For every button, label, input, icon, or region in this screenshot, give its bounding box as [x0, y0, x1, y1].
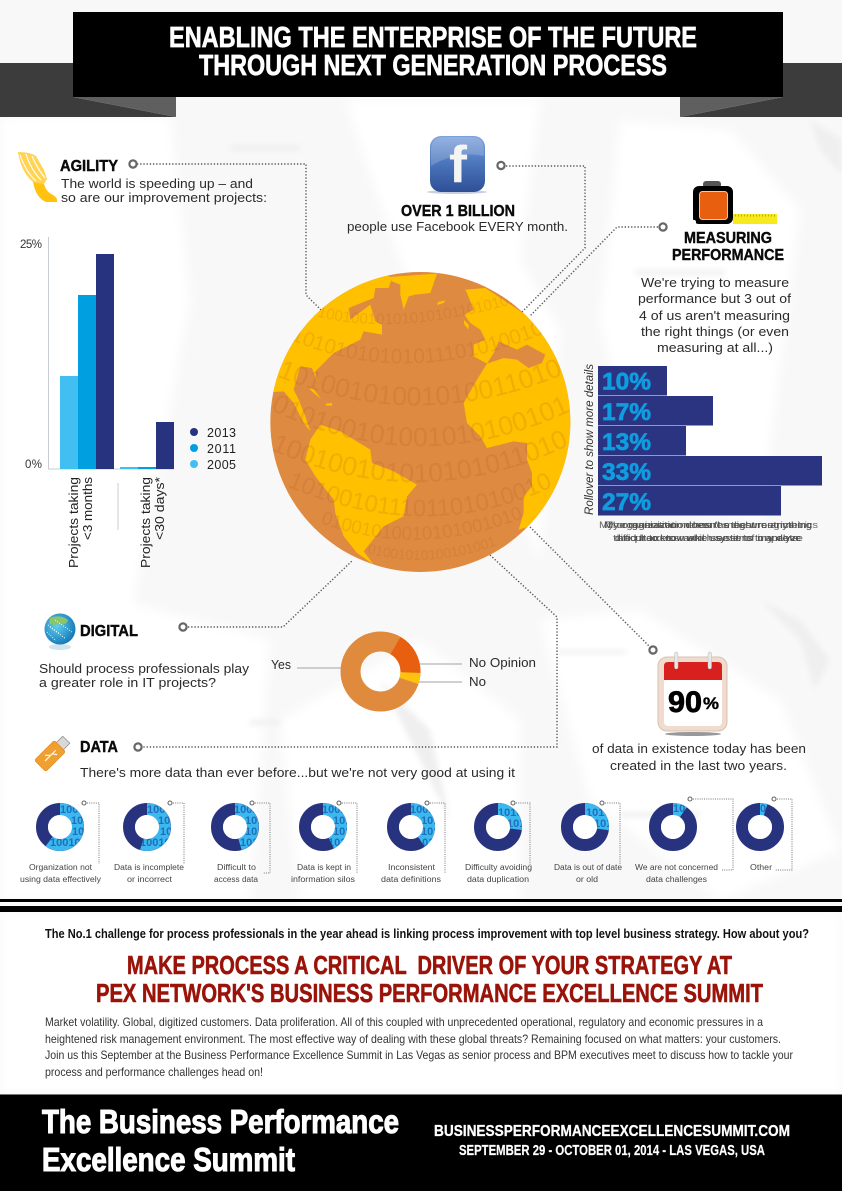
- donut: inconsistent definitions: 1010: [416, 837, 440, 849]
- title banner: ENABLING THE ENTERPRISE OF THE FUTURE: [169, 22, 697, 54]
- callout: facebook: people use Facebook EVERY month.: [347, 219, 568, 234]
- heading: agility: The world is speeding up – and: [61, 176, 253, 191]
- donut: organization not using data effectively: using data effectively: [20, 875, 101, 884]
- donut: data duplication: 10101: [498, 807, 529, 819]
- title banner: [73, 12, 783, 97]
- donut: organization not using data effectively: 101: [72, 826, 90, 838]
- donut chart: digital poll: Yes: [271, 657, 291, 672]
- section: digital: a greater role in IT projects?: [39, 675, 216, 690]
- donut: difficult to access data: 1010: [245, 815, 269, 827]
- donut: inconsistent definitions: 1010: [421, 826, 445, 838]
- icon: calendar 90%: %: [703, 694, 719, 713]
- overlapping rollover captions: and hard to make sense of my data: [617, 533, 800, 544]
- donut: organization not using data effectively: 100101: [60, 804, 97, 816]
- donut: organization not using data effectively: Organization not: [29, 863, 93, 872]
- mediterranean and arabia: [487, 341, 545, 368]
- north america: [273, 276, 391, 431]
- donut: information silos: [291, 804, 357, 884]
- donut: difficult to access data: 1010: [245, 826, 269, 838]
- donut: difficult to access data: Difficult to: [217, 863, 257, 872]
- footer band: SEPTEMBER 29 - OCTOBER 01, 2014 - LAS VEGAS, USA: [459, 1143, 765, 1159]
- donut: information silos: 1010: [333, 826, 357, 838]
- binary digits on globe: 1010101010101110101001010101: [294, 322, 542, 364]
- donut: data is incomplete: Data is incomplete: [114, 863, 185, 872]
- bar chart: project duration: Projects taking: [138, 477, 153, 568]
- bar chart: project duration: 0%: [25, 459, 42, 471]
- bar chart: project duration: 25%: [20, 239, 42, 251]
- greenland: [389, 274, 437, 310]
- binary digits on globe: 01001010100101001: [368, 538, 496, 560]
- iceland and caribbean islands: [309, 300, 469, 406]
- overlapping rollover captions: difficult to know which systems to analyze: [615, 533, 801, 544]
- section: data: [80, 739, 515, 780]
- donut: data out of date: or old: [576, 875, 598, 884]
- binary digits on globe: 01001010010101001010: [322, 508, 521, 540]
- body paragraph: Market volatility. Global, digitized customers. Data proliferation. All of this coupled with unprecedented operational, regulatory and economic pressures in a: [45, 1015, 763, 1029]
- overlapping rollover captions: The organization has the right metrics in: [606, 520, 806, 531]
- donut: data out of date: 1010: [594, 818, 618, 830]
- donut: data out of date: Data is out of date: [554, 863, 623, 872]
- section: digital: DIGITAL: [80, 623, 138, 640]
- section: data: There's more data than ever before...but we're not very good at using it: [80, 765, 515, 780]
- donut: information silos: Data is kept in: [297, 863, 351, 872]
- donut: other: 01: [760, 803, 772, 815]
- donut: inconsistent definitions: data definitions: [381, 875, 441, 884]
- header ribbon right fold: [680, 63, 842, 117]
- donut: organization not using data effectively: 1001010: [50, 837, 93, 849]
- donut: data out of date: [554, 807, 623, 884]
- chart legend: 2013: [207, 426, 236, 440]
- binary digits on globe: 10010010101010101101010: [273, 431, 566, 482]
- section: digital: Should process professionals play: [39, 661, 250, 676]
- donut: inconsistent definitions: Inconsistent: [388, 863, 436, 872]
- body paragraph: [45, 1015, 793, 1079]
- donut: data is incomplete: 1001010: [140, 837, 183, 849]
- donut: data is incomplete: 101: [160, 826, 178, 838]
- donut: other: [742, 803, 778, 872]
- callout: facebook: OVER 1 BILLION: [401, 203, 515, 220]
- bar chart: project duration: [20, 237, 174, 568]
- bar chart: project duration: <3 months: [80, 476, 95, 540]
- donut: information silos: 1010: [333, 815, 357, 827]
- icon: facebook: f: [449, 136, 468, 194]
- text: measuring performance: the right things (or even: [641, 324, 789, 339]
- donut: data out of date: 10101: [586, 807, 617, 819]
- connector lines: [129, 160, 667, 751]
- globe: [270, 272, 570, 572]
- bar chart: measurement shares: 17%: [602, 399, 651, 426]
- donut chart: digital poll: No Opinion: [469, 655, 536, 670]
- footer band: Excellence Summit: [42, 1141, 295, 1178]
- binary digits on globe: 10100101001010011010010: [279, 360, 560, 406]
- body paragraph: process and performance challenges head on!: [45, 1065, 263, 1079]
- donut: data is incomplete: 1010: [158, 815, 182, 827]
- donut: data is incomplete: or incorrect: [127, 875, 173, 884]
- overlapping rollover captions: the process and use it to improve: [613, 533, 803, 544]
- overlapping rollover captions: [599, 520, 818, 544]
- summit headline: [96, 950, 763, 1008]
- chart legend: 2005: [207, 458, 236, 472]
- callout: 90 percent: created in the last two years.: [610, 758, 787, 773]
- footer band: [0, 1094, 842, 1191]
- donut: other: Other: [750, 863, 772, 872]
- heading: measuring performance: PERFORMANCE: [672, 247, 784, 264]
- bar chart: measurement shares: 13%: [602, 429, 651, 456]
- section: digital: [39, 623, 250, 690]
- donut: data is incomplete: 100101: [147, 804, 184, 816]
- donut: data duplication: [465, 807, 532, 884]
- bar chart: measurement shares: 27%: [602, 489, 651, 516]
- bar chart: measurement shares: 10%: [602, 368, 651, 396]
- section: data: DATA: [80, 739, 118, 756]
- text: measuring performance: [638, 275, 791, 355]
- donut: data is incomplete: [114, 804, 185, 884]
- donut: difficult to access data: [211, 803, 259, 882]
- chart legend: 2011: [207, 442, 236, 456]
- donut: information silos: 1010: [328, 837, 352, 849]
- callout: 90 percent: of data in existence today has been: [592, 741, 806, 756]
- text: measuring performance: We're trying to measure: [641, 275, 789, 290]
- small donut connectors: [82, 797, 792, 873]
- header ribbon left fold: [0, 63, 176, 117]
- donut: not concerned: 101: [673, 803, 691, 815]
- donut: not concerned: We are not concerned: [635, 863, 718, 872]
- south america: [305, 425, 417, 565]
- donut: not concerned: data challenges: [646, 875, 707, 884]
- donut: data duplication: data duplication: [467, 875, 529, 884]
- donut: organization not using data effectively: 1010: [71, 815, 95, 827]
- bar chart: measurement shares: [584, 364, 822, 516]
- icon: facebook: [427, 136, 487, 194]
- binary digits on globe: 0101001010010101001011011: [274, 396, 570, 446]
- donut: information silos: 1001: [322, 804, 346, 816]
- icon: calendar 90%: [658, 652, 727, 736]
- donut: difficult to access data: access data: [214, 875, 259, 884]
- donut: inconsistent definitions: 1010: [421, 815, 445, 827]
- binary digits on globe: 10010010101010101101010100: [318, 296, 512, 324]
- heading: measuring performance: MEASURING: [684, 230, 772, 247]
- bar chart: measurement shares: Rollover to show more details: [584, 364, 596, 515]
- icon: digital globe: [44, 614, 76, 650]
- heading: agility: AGILITY: [60, 158, 119, 175]
- icon: usb stick: [34, 734, 72, 772]
- donut chart: digital poll: [271, 637, 536, 702]
- divider double rule: [0, 899, 842, 912]
- donut: not concerned: [635, 803, 718, 884]
- donut: inconsistent definitions: 1001: [410, 804, 434, 816]
- heading: agility: [60, 158, 267, 205]
- text: measuring performance: performance but 3 out of: [638, 291, 791, 306]
- donut chart: digital poll: No: [469, 674, 486, 689]
- donut: difficult to access data: 1010: [240, 837, 264, 849]
- donut: data duplication: Difficulty avoiding: [465, 863, 532, 872]
- europe africa: [464, 288, 570, 530]
- binary digits on globe: [273, 296, 570, 560]
- donut: information silos: information silos: [291, 875, 355, 884]
- donut: difficult to access data: 1001: [234, 804, 258, 816]
- icon: winged foot: [18, 152, 57, 202]
- binary digits on globe: 101001011101101010010: [289, 474, 550, 516]
- overlapping rollover captions: My organization doesn't measure anything: [604, 520, 812, 531]
- text: measuring performance: measuring at all...): [657, 340, 773, 355]
- icon: calendar 90%: 90: [668, 686, 702, 719]
- callout: 90 percent: [592, 741, 806, 773]
- donut: data duplication: 1010: [507, 818, 531, 830]
- overlapping rollover captions: My organization measures the wrong metrics: [599, 520, 818, 531]
- footer band: BUSINESSPERFORMANCEEXCELLENCESUMMIT.COM: [434, 1123, 790, 1140]
- chart legend: [190, 426, 236, 472]
- bar chart: project duration: <30 days*: [152, 477, 167, 540]
- heading: agility: so are our improvement projects:: [61, 190, 267, 205]
- bar chart: measurement shares: 33%: [602, 459, 651, 486]
- donut: inconsistent definitions: [381, 804, 445, 884]
- bar chart: project duration: Projects taking: [66, 477, 81, 568]
- heading: measuring performance: [672, 230, 784, 264]
- icon: tape measure: [692, 181, 777, 224]
- text: measuring performance: 4 of us aren't measuring: [639, 308, 790, 323]
- callout: facebook: [347, 203, 568, 234]
- title banner: THROUGH NEXT GENERATION PROCESS: [199, 50, 667, 82]
- footer band: The Business Performance: [42, 1103, 399, 1140]
- donut: organization not using data effectively: [20, 804, 101, 884]
